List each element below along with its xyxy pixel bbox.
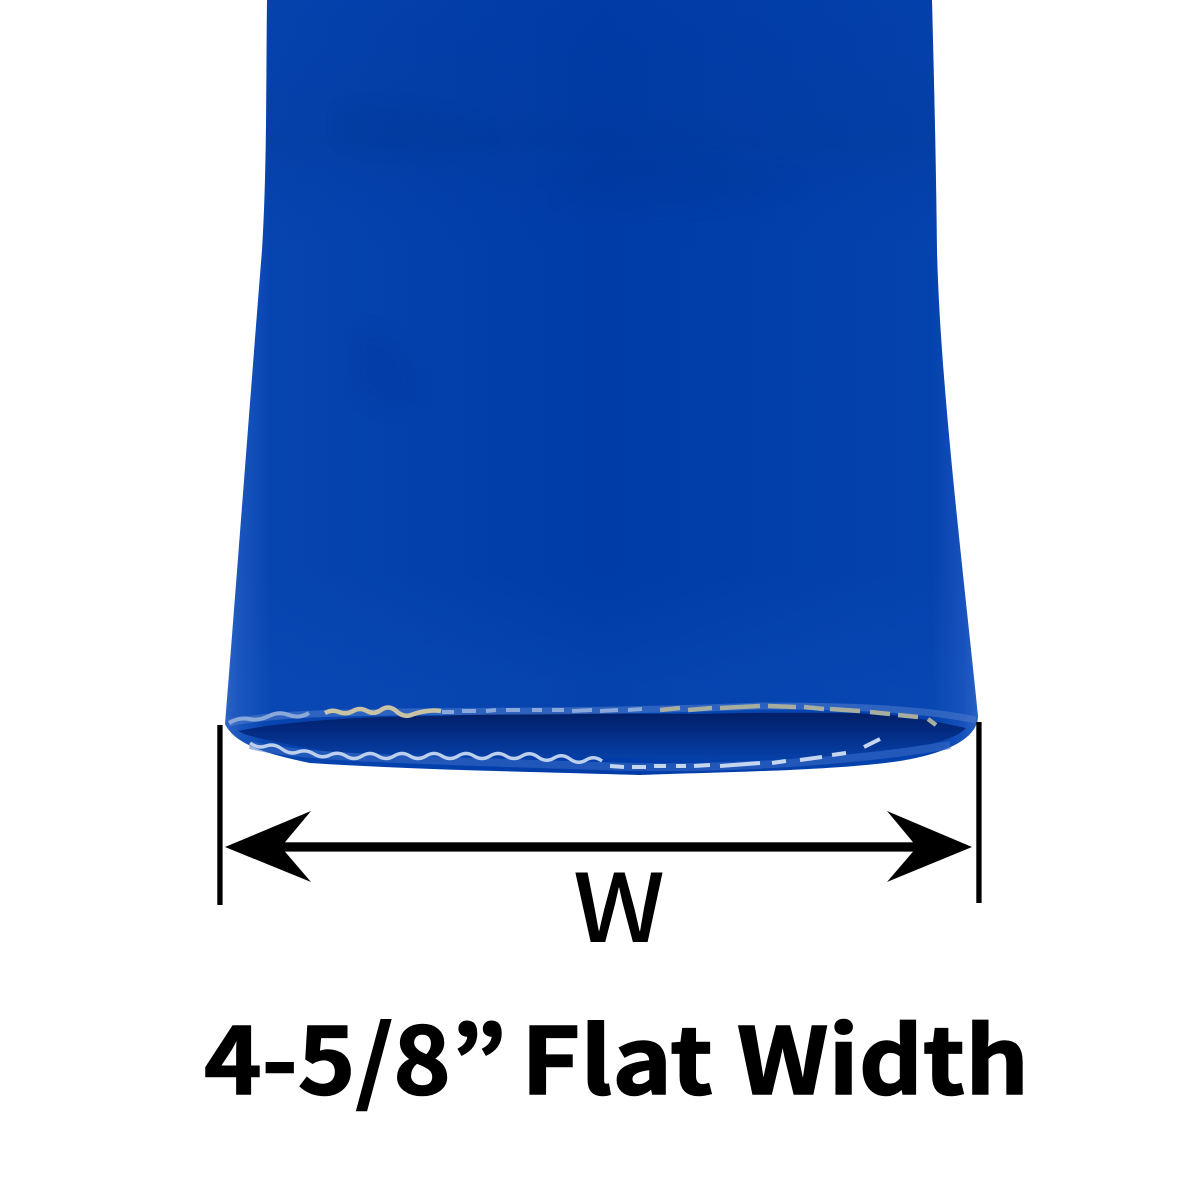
heading: flat width: Width (737, 988, 1029, 1121)
heading: flat width: 4-5/8” (204, 988, 507, 1121)
heading: flat width (204, 988, 1029, 1121)
upper rim seam (229, 713, 309, 723)
arrow: width dimension (217, 722, 982, 905)
hose opening (238, 713, 966, 760)
label: W: W (573, 834, 665, 970)
heading: flat width: Flat (521, 988, 713, 1121)
icon: blue lay-flat hose (225, 0, 978, 775)
lower wavy seam (250, 743, 602, 762)
rim band (229, 706, 976, 723)
lower seam band (250, 745, 950, 767)
